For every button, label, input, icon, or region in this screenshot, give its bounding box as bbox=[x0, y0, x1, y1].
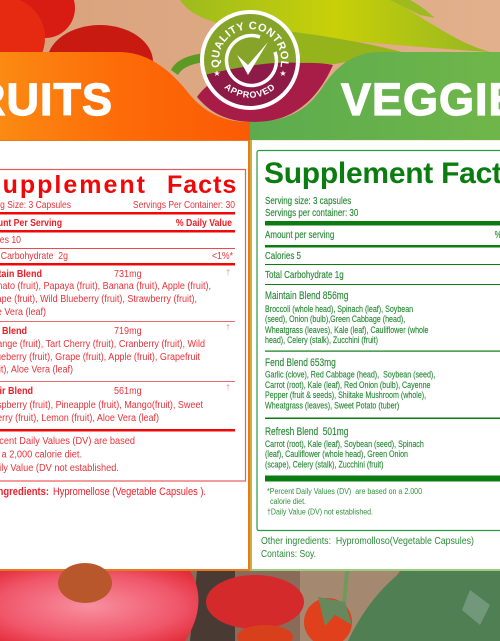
fruits rules bbox=[0, 212, 235, 432]
fruits title bbox=[0, 171, 237, 199]
green header band bbox=[250, 52, 500, 140]
fruits third blend bbox=[0, 382, 230, 424]
pomegranate bbox=[0, 571, 198, 641]
veggies fend blend: Fend Blend 653mg bbox=[265, 357, 336, 369]
fruits other ingredients bbox=[0, 486, 206, 498]
badge arc text: quality control: QUALITY CONTROL bbox=[211, 22, 289, 68]
fruits third blend: † bbox=[226, 382, 230, 392]
strawberries bbox=[206, 575, 304, 629]
background photo: top wood, tomatoes and peppers bbox=[0, 0, 500, 140]
veggies nutrition rows: Amount per serving bbox=[265, 229, 334, 240]
veggies other ingredients bbox=[261, 535, 474, 560]
veggies rules bbox=[265, 221, 500, 482]
fruits facts box bbox=[0, 170, 246, 481]
orange header band bbox=[0, 52, 250, 140]
panel: veggies bbox=[250, 140, 500, 571]
quality control approved badge bbox=[200, 10, 300, 110]
veggies title: Supplement Fact bbox=[264, 157, 500, 190]
badge stars: ★ bbox=[213, 69, 221, 78]
fruits maintain blend bbox=[0, 267, 230, 318]
veggies nutrition rows bbox=[265, 229, 500, 280]
fruits second blend: † bbox=[226, 322, 230, 332]
melon bbox=[348, 571, 500, 641]
veggies serving info: Servings per container: 30 bbox=[265, 207, 358, 218]
veggies maintain blend bbox=[265, 290, 429, 345]
veggies nutrition rows: Calories 5 bbox=[265, 250, 301, 261]
veggies footnotes: †Daily Value (DV) not established. bbox=[267, 506, 373, 516]
fruits nutrition rows: % Daily Value bbox=[176, 217, 233, 229]
panel: fruits bbox=[0, 140, 250, 571]
fruits other ingredients: Hypromellose (Vegetable Capsules ). bbox=[53, 486, 206, 498]
veggies footnotes bbox=[267, 486, 422, 516]
veggies fend blend: Pepper (fruit & seeds), Shiitake Mushroom (whole), bbox=[265, 389, 426, 400]
fruits maintain blend: 731mg bbox=[114, 268, 142, 280]
veggies maintain blend: (seed), Onion (bulb),Green Cabbage (head), bbox=[265, 313, 405, 324]
fruits second blend: 719mg bbox=[114, 325, 142, 337]
background photo: bottom fruit bbox=[0, 563, 500, 641]
veggies footnotes: *Percent Daily Values (DV) are based on a 2.000 bbox=[267, 486, 422, 496]
veggies facts box bbox=[257, 150, 500, 530]
fruits second blend bbox=[0, 322, 230, 376]
veggies fend blend bbox=[265, 357, 435, 411]
veggies refresh blend: (leaf), Cauliflower (whole head), Green Onion bbox=[265, 448, 408, 459]
badge arc text: approved: APPROVED bbox=[224, 84, 274, 98]
veggies refresh blend bbox=[265, 426, 424, 470]
veggies maintain blend: Broccoli (whole head), Spinach (leaf), Soybean bbox=[265, 303, 413, 314]
quality control approved badge: ★ bbox=[279, 69, 287, 78]
veggies footnotes: calorie diet. bbox=[270, 496, 306, 506]
veggies refresh blend: Carrot (root), Kale (leaf), Soybean (seed), Spinach bbox=[265, 438, 424, 449]
veggies other ingredients: Contains: Soy. bbox=[261, 548, 316, 560]
fruits maintain blend: † bbox=[226, 267, 230, 277]
fruits third blend: 561mg bbox=[114, 385, 142, 397]
veggies nutrition rows: Total Carbohydrate 1g bbox=[265, 269, 344, 280]
veggies serving info: Serving size: 3 capsules bbox=[265, 195, 352, 206]
badge checkmark bbox=[237, 42, 268, 75]
veggies fend blend: Wheatgrass (leaves), Sweet Potato (tuber) bbox=[265, 399, 399, 411]
fruits nutrition rows bbox=[0, 217, 233, 262]
veggies maintain blend: head), Celery (stalk), Zucchini (fruit) bbox=[265, 334, 378, 345]
fruits serving info: Servings Per Container: 30 bbox=[133, 199, 235, 211]
fruits serving info bbox=[0, 199, 235, 211]
fruits nutrition rows: <1%* bbox=[212, 250, 233, 262]
veggies fend blend: Carrot (root), Kale (leaf), Red Onion (bulb), Cayenne bbox=[265, 379, 431, 390]
badge check ring bbox=[226, 36, 276, 86]
veggies maintain blend: Maintain Blend 856mg bbox=[265, 290, 348, 302]
veggies serving info bbox=[265, 195, 358, 218]
fruits title: Facts bbox=[167, 171, 237, 199]
veggies refresh blend: (scape), Celery (stalk), Zucchini (fruit) bbox=[265, 458, 384, 470]
veggies refresh blend: Refresh Blend 501mg bbox=[265, 426, 348, 438]
veggies fend blend: Garlic (clove), Red Cabbage (head), Soybean (seed), bbox=[265, 368, 435, 380]
veggies maintain blend: Wheatgrass (leaves), Kale (leaf), Cauliflower (whole bbox=[265, 324, 429, 335]
fruits footnotes bbox=[0, 436, 135, 474]
